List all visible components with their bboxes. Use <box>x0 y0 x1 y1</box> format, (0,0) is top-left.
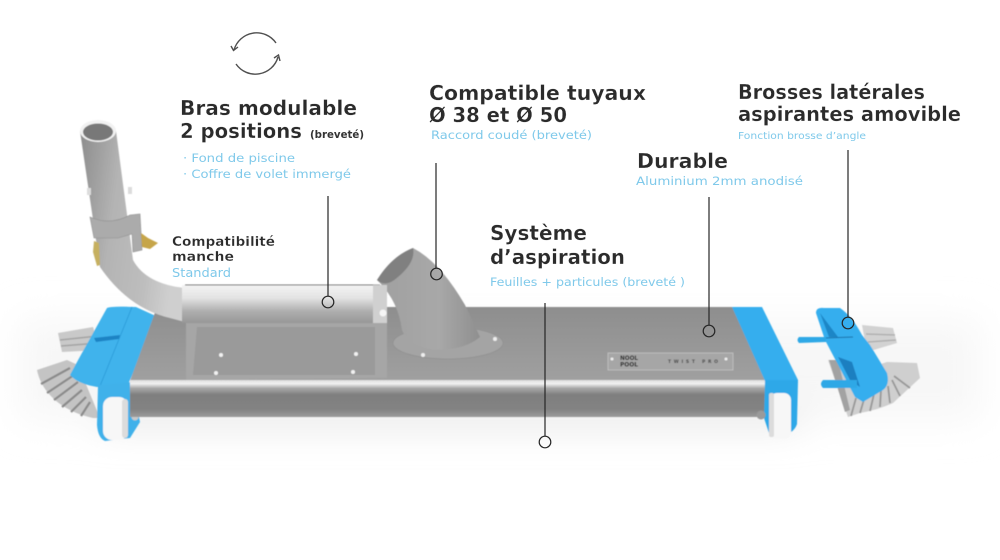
aluminium plate <box>130 307 766 381</box>
text: arm heading <box>180 96 364 181</box>
text: arm heading: 2 positions <box>180 119 302 143</box>
text: handle compatibility: Compatibilité <box>172 235 275 250</box>
text: side brushes <box>738 80 961 142</box>
text: pipe compatibility <box>429 81 646 142</box>
text: durable <box>636 149 803 188</box>
right wheel <box>756 393 791 439</box>
text: side brushes: Fonction brosse d’angle <box>738 131 866 142</box>
text: arm heading: Bras modulable <box>180 96 357 120</box>
suction elbow with flange <box>377 248 503 359</box>
icon: rotation arrows <box>231 33 280 74</box>
text: side brushes: aspirantes amovible <box>738 102 961 126</box>
left wheel <box>103 397 138 440</box>
modular arm tube <box>80 120 387 323</box>
text: pipe compatibility: Ø 38 et Ø 50 <box>429 103 567 127</box>
vacuum head product illustration <box>37 120 920 441</box>
clamp with wing nuts <box>87 187 158 266</box>
brand plate: TWIST PRO <box>668 359 718 365</box>
text: arm heading: · Coffre de volet immergé <box>183 167 351 181</box>
callout line: durable <box>703 197 715 337</box>
soft floor shadow <box>20 320 980 426</box>
callout line: arm <box>322 196 334 308</box>
brand plate <box>608 353 733 370</box>
text: suction system: Feuilles + particules (breveté ) <box>490 275 685 289</box>
brand plate: POOL <box>620 360 638 368</box>
front beam <box>130 380 767 417</box>
detachable side brush <box>798 308 920 417</box>
text: pipe compatibility: Compatible tuyaux <box>429 81 646 105</box>
text: side brushes: Brosses latérales <box>738 80 925 104</box>
support bracket <box>186 314 387 380</box>
text: pipe compatibility: Raccord coudé (breveté) <box>431 128 592 142</box>
text: handle compatibility: manche <box>172 250 234 265</box>
right blue end cap <box>732 307 798 437</box>
text: durable: Durable <box>637 149 728 173</box>
callout line: suction <box>539 303 551 448</box>
callout line: elbow <box>431 163 442 280</box>
callout line: brushes <box>842 150 854 329</box>
text: handle compatibility <box>172 235 275 280</box>
left blue end cap <box>70 307 158 441</box>
text: arm heading: · Fond de piscine <box>183 151 295 165</box>
left side brushes <box>37 327 100 418</box>
text: arm heading: (breveté) <box>310 129 364 141</box>
text: handle compatibility: Standard <box>172 266 231 280</box>
text: suction system <box>490 221 685 289</box>
text: durable: Aluminium 2mm anodisé <box>636 174 803 188</box>
text: suction system: Système <box>490 221 587 245</box>
text: suction system: d’aspiration <box>490 245 625 269</box>
brand plate: NOOL <box>620 354 638 362</box>
